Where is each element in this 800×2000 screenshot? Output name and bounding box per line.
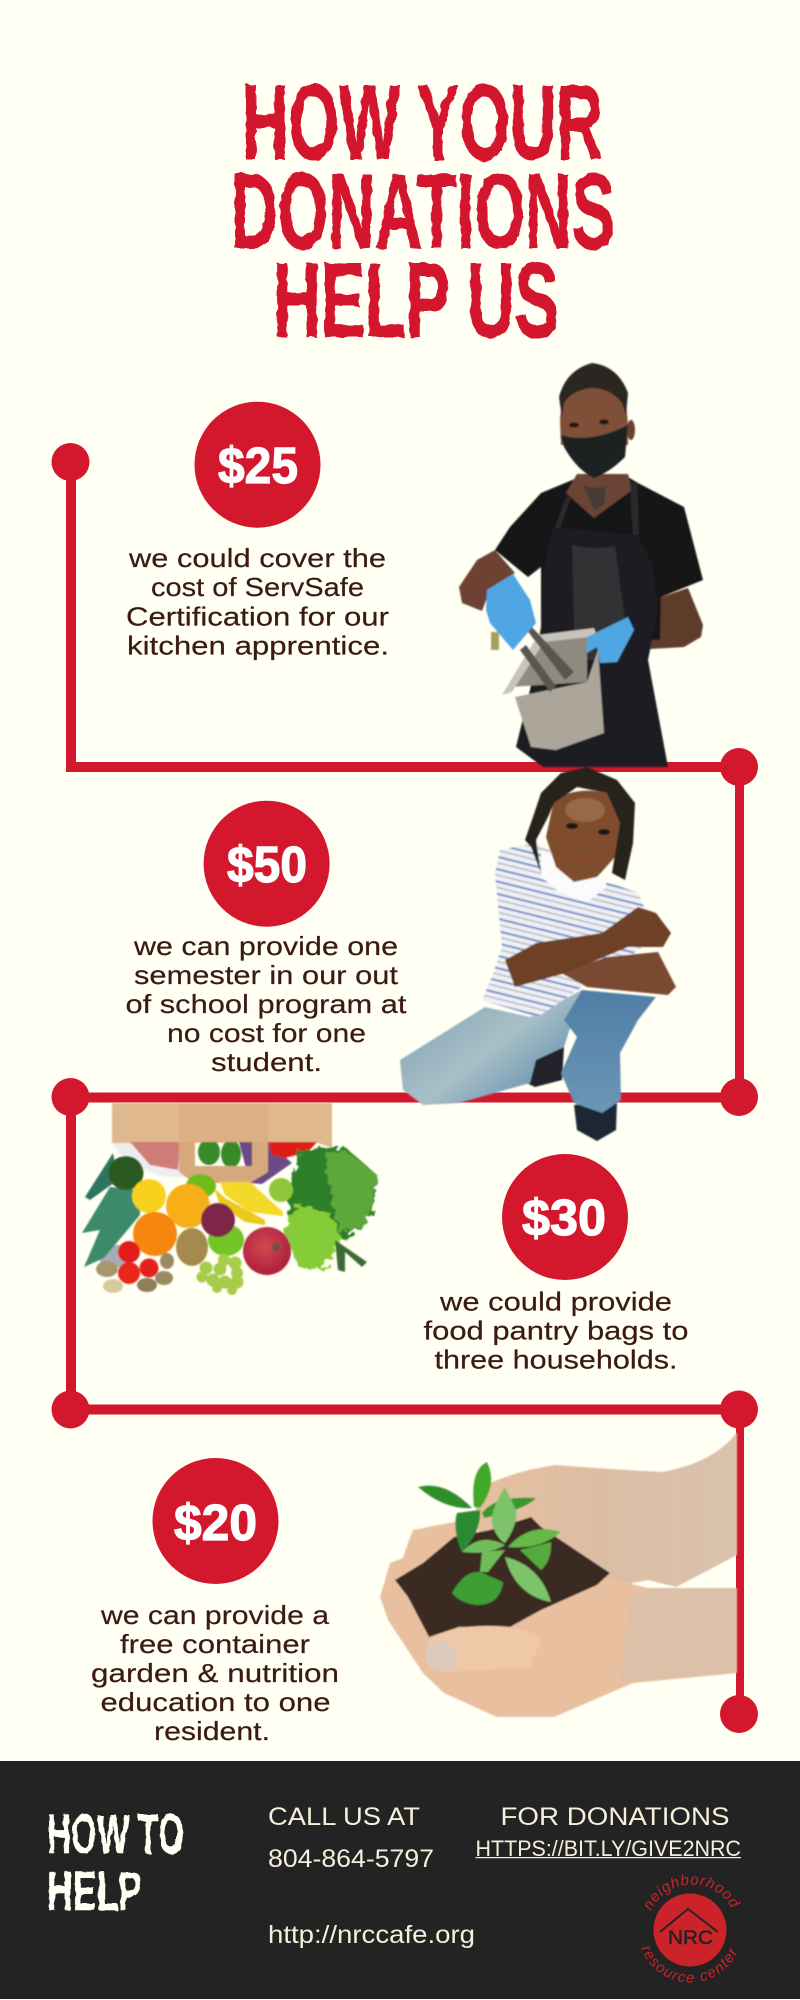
text: $30 description (424, 1286, 688, 1374)
text: $50 description: student. (211, 1047, 322, 1077)
text: $50 description: no cost for one (167, 1018, 366, 1048)
panel: $30 donation (82, 1103, 688, 1374)
donation details: FOR DONATIONS (500, 1803, 730, 1831)
badge: $30 (502, 1154, 628, 1280)
text: $25 description (126, 543, 389, 660)
text: $50 description: of school program at (126, 989, 407, 1019)
footer (0, 1761, 800, 1999)
text: $25 description: we could cover the (128, 543, 386, 573)
text: $30 description: we could provide (439, 1286, 672, 1316)
title: HELP US (273, 240, 559, 360)
badge: $50 (204, 801, 330, 927)
contact details: CALL US AT (268, 1803, 420, 1831)
text: $20 description: education to one (100, 1687, 330, 1717)
badge: $25: $25 (218, 437, 298, 494)
text: $20 description (91, 1600, 339, 1746)
logo: neighborhood resource center: resource center (641, 1946, 736, 1983)
panel: $25 donation (126, 363, 703, 767)
footer heading (47, 1802, 184, 1922)
text: $20 description: we can provide a (100, 1600, 330, 1630)
badge: $50: $50 (227, 836, 307, 893)
logo: neighborhood resource center: NRC (668, 1928, 713, 1949)
logo: neighborhood resource center: neighborhood (644, 1874, 742, 1911)
text: $20 description: garden & nutrition (91, 1658, 339, 1688)
image: hands holding seedling (380, 1432, 737, 1717)
seedling leaves (418, 1462, 561, 1605)
donation details (476, 1803, 741, 1861)
title (231, 62, 615, 360)
image: kitchen apprentice (459, 363, 703, 767)
contact details (268, 1803, 475, 1949)
image: grocery bag with produce (82, 1103, 377, 1295)
contact details: http://nrccafe.org (268, 1921, 475, 1949)
badge: $20: $20 (174, 1494, 257, 1551)
footer heading: HOW TO (47, 1802, 184, 1865)
badge: $30: $30 (522, 1189, 606, 1246)
image: smiling boy (400, 767, 676, 1141)
text: $25 description: kitchen apprentice. (127, 630, 389, 660)
donation details: HTTPS://BIT.LY/GIVE2NRC (476, 1836, 741, 1861)
timeline connector (52, 443, 758, 1733)
badge: $20 (152, 1458, 278, 1584)
panel: $20 donation (91, 1432, 737, 1746)
text: $50 description: we can provide one (133, 931, 398, 961)
logo: neighborhood resource center (641, 1874, 742, 1983)
footer heading: HELP (47, 1859, 142, 1922)
text: $50 description (126, 931, 407, 1077)
text: $50 description: semester in our out (134, 960, 399, 990)
text: $30 description: three households. (434, 1344, 678, 1374)
text: $20 description: free container (120, 1629, 310, 1659)
text: $25 description: cost of ServSafe (151, 572, 364, 602)
contact details: 804-864-5797 (268, 1845, 434, 1873)
panel: $50 donation (126, 767, 676, 1141)
text: $25 description: Certification for our (126, 602, 389, 632)
text: $20 description: resident. (154, 1716, 270, 1746)
badge: $25 (194, 402, 320, 528)
text: $30 description: food pantry bags to (424, 1316, 688, 1346)
